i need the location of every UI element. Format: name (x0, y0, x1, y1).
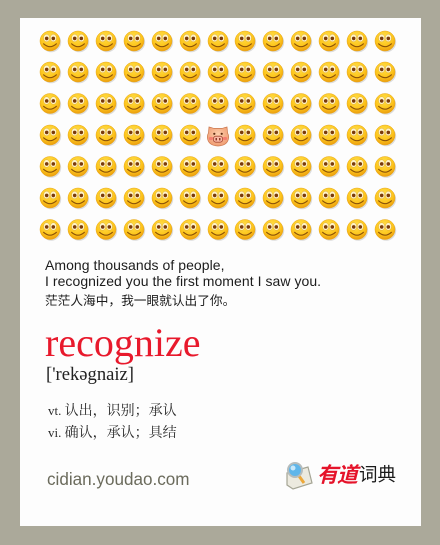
english sentence: I recognized you the first moment I saw you. (45, 273, 321, 289)
icon: pig face (207, 127, 229, 146)
website url: cidian.youdao.com (47, 470, 190, 489)
row 1 (40, 31, 396, 52)
definition: vt: vt. 认出，识别；承认 (48, 403, 177, 419)
row 6 (40, 188, 396, 209)
row 2 (40, 62, 396, 83)
english sentence (45, 257, 321, 289)
chinese sentence: 茫茫人海中，我一眼就认出了你。 (45, 294, 235, 308)
logo text: 词典: 词典 (359, 464, 396, 485)
logo text: 有道: 有道 (317, 464, 357, 487)
english sentence: Among thousands of people, (45, 257, 225, 273)
row 3 (40, 94, 396, 115)
headword: recognize (45, 320, 200, 365)
emoji grid (40, 30, 396, 241)
logo: youdao dictionary (286, 462, 396, 490)
icon: magnifier over book (286, 462, 313, 490)
row 4 with pig (40, 125, 396, 146)
definition: vi: vi. 确认，承认；具结 (48, 425, 177, 441)
row 5 (40, 156, 396, 178)
phonetic: ['rekəgnaiz] (46, 364, 134, 385)
row 7 (40, 220, 396, 241)
